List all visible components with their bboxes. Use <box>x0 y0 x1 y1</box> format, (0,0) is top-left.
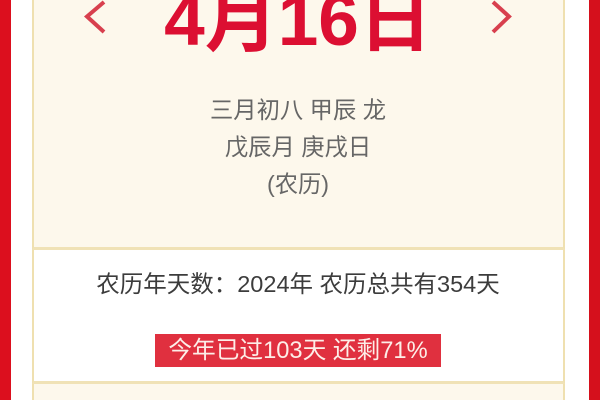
right red border <box>589 0 600 400</box>
panel: year stats <box>32 250 565 384</box>
icon: previous arrow <box>84 0 106 34</box>
lunar year days text: 农历年天数：2024年 农历总共有354天 <box>96 271 500 297</box>
panel: date <box>32 0 565 250</box>
icon: next arrow <box>492 0 512 34</box>
lunar calendar note: (农历) <box>267 171 329 197</box>
progress badge: 今年已过103天 还剩71% <box>168 338 428 364</box>
lunar date line: 三月初八 甲辰 龙 <box>210 97 386 123</box>
left red border <box>0 0 11 400</box>
panel: next section <box>32 384 565 400</box>
ganzhi line: 戊辰月 庚戌日 <box>225 134 371 160</box>
